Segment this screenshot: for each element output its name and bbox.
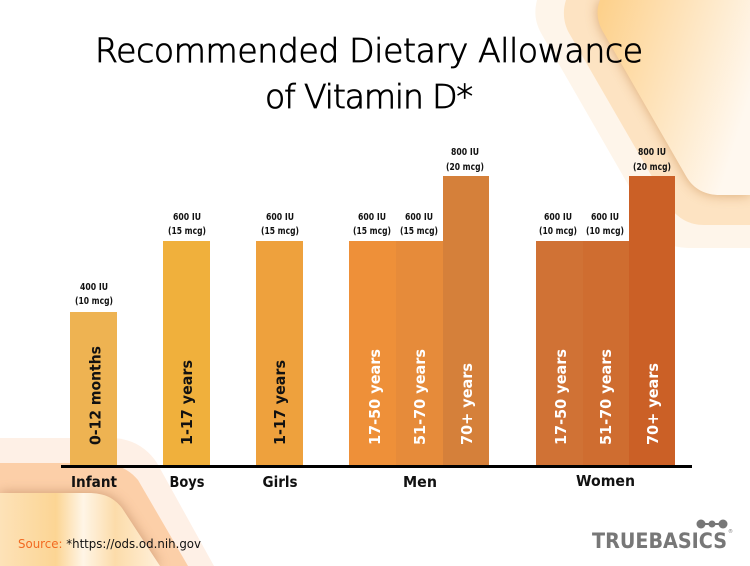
bar: men 70+ years [443,147,489,466]
bar: men 70+ years: 70+ years [458,363,476,445]
bar: women 70+ years: 70+ years [644,363,662,445]
category labels: Girls [262,473,298,491]
bar: men 17-50 years: 600 IU [358,212,386,223]
bar: boys 1-17 years: (15 mcg) [168,226,206,237]
bar: women 17-50 years: 17-50 years [552,349,570,445]
bar: infant 0-12 months: 400 IU [80,282,108,293]
logo icon: molecule dots [696,520,728,528]
bar: infant 0-12 months: (10 mcg) [75,296,113,307]
bar: women 17-50 years: 600 IU [544,212,572,223]
bar: men 51-70 years [396,212,443,466]
bar: girls 1-17 years: 1-17 years [271,360,289,445]
bar: girls 1-17 years: (15 mcg) [261,226,299,237]
bar: boys 1-17 years [163,212,210,466]
logo: TrueBasics: TRUEBASICS [592,529,727,553]
category labels: Infant [71,473,117,491]
bar: women 17-50 years: (10 mcg) [539,226,577,237]
logo: TrueBasics [592,520,733,553]
source note: Source: *https://ods.od.nih.gov [18,537,201,551]
bar: women 51-70 years: 600 IU [591,212,619,223]
decorative hexagon: top right [535,0,750,248]
bar: women 51-70 years [583,212,629,466]
bar: men 51-70 years: 600 IU [405,212,433,223]
bar: men 70+ years: (20 mcg) [446,162,484,173]
category labels: Boys [170,473,205,491]
bar: women 70+ years [629,147,675,466]
bar: men 70+ years: 800 IU [451,147,479,158]
decorative hexagon: bottom left [0,438,214,566]
bar: men 17-50 years [349,212,396,466]
title [95,31,643,116]
axis baseline [61,465,692,468]
bar chart [70,147,675,466]
bar: girls 1-17 years [256,212,303,466]
bar: infant 0-12 months: 0-12 months [86,346,104,445]
category labels [71,472,635,491]
bar: women 17-50 years [536,212,583,466]
bar: men 51-70 years: 51-70 years [411,349,429,445]
bar: infant 0-12 months [70,282,117,466]
bar: girls 1-17 years: 600 IU [266,212,294,223]
bar: men 17-50 years: (15 mcg) [353,226,391,237]
bar: women 51-70 years: 51-70 years [597,349,615,445]
category labels: Men [403,473,437,491]
bar: women 70+ years: 800 IU [638,147,666,158]
title: of Vitamin D* [265,77,473,116]
category labels: Women [576,472,635,490]
bar: men 17-50 years: 17-50 years [366,349,384,445]
bar: men 51-70 years: (15 mcg) [400,226,438,237]
bar: boys 1-17 years: 600 IU [173,212,201,223]
bar: women 51-70 years: (10 mcg) [586,226,624,237]
title: Recommended Dietary Allowance [95,31,643,70]
bar: women 70+ years: (20 mcg) [633,162,671,173]
bar: boys 1-17 years: 1-17 years [178,360,196,445]
logo: TrueBasics: ® [728,528,733,535]
